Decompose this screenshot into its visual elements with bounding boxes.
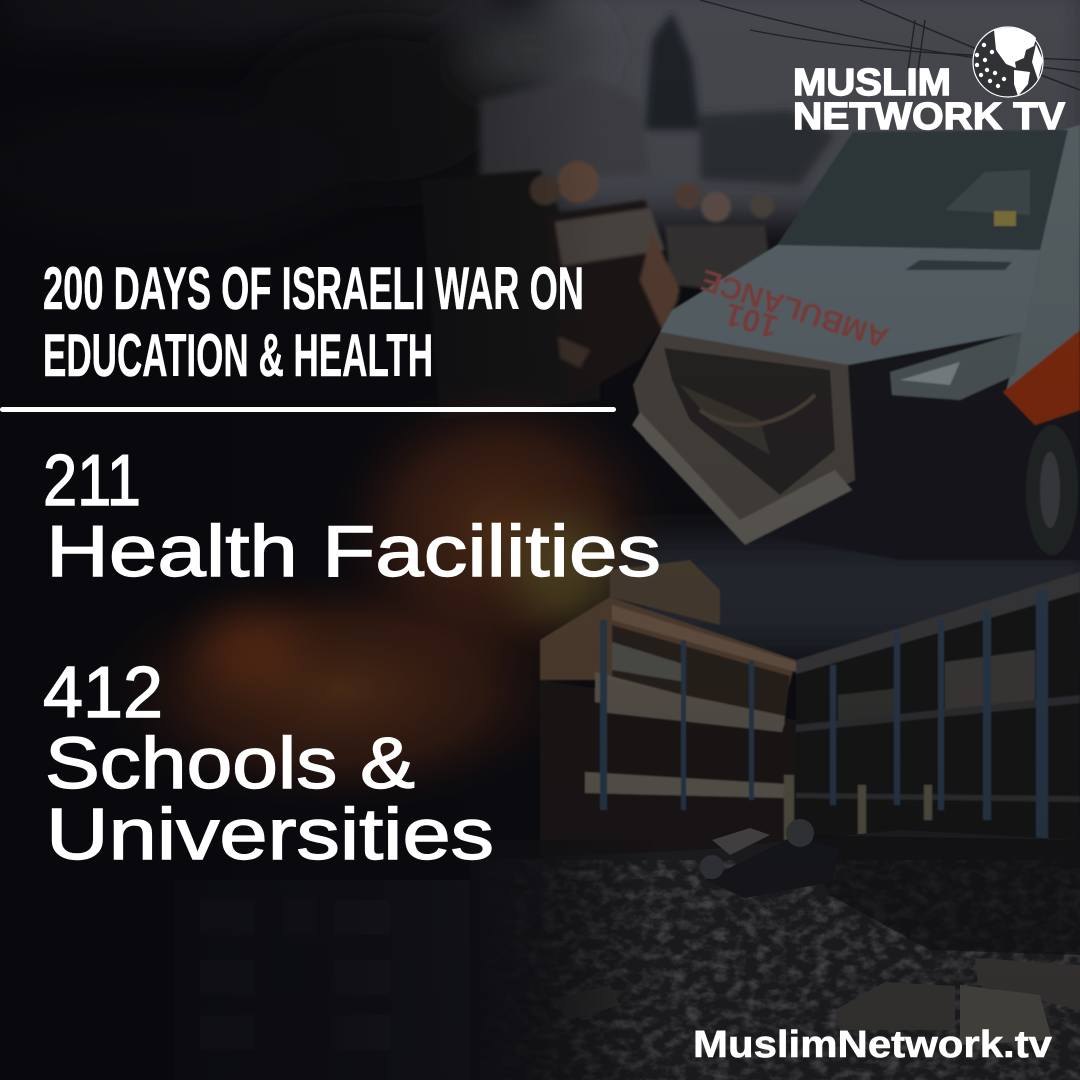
concrete blocks <box>975 958 1080 1010</box>
logo wordmark line 2: NETWORK TV <box>793 96 1066 138</box>
left wing upper bay <box>612 625 790 720</box>
hood lettering: AMBULANCE <box>697 262 893 354</box>
crowd of people <box>420 161 774 420</box>
front bumper and grille <box>633 332 855 535</box>
left wing dark bays <box>540 680 796 860</box>
number 412: 412 <box>43 653 163 733</box>
overturned car <box>705 838 840 898</box>
balcony railing <box>612 642 686 682</box>
bombed school building <box>540 560 1080 860</box>
sky behind the ambulance <box>0 0 1080 650</box>
tower silhouette and low buildings <box>480 12 835 185</box>
power lines <box>700 0 1080 90</box>
ghost tower block <box>175 880 545 1080</box>
left wing slabs <box>595 672 785 728</box>
rubble field <box>480 819 1080 1080</box>
fire glow <box>100 380 670 810</box>
label schools: Schools & <box>45 724 415 804</box>
label health facilities: Health Facilities <box>46 512 661 592</box>
title line 2: EDUCATION & HEALTH <box>43 322 433 389</box>
title <box>43 255 584 389</box>
columns <box>600 590 1048 840</box>
stat: health facilities <box>43 441 661 592</box>
ambulance side panel <box>1005 125 1080 395</box>
logo wordmark line 1: MUSLIM <box>793 62 951 104</box>
logo: Muslim Network TV <box>793 27 1066 138</box>
stat: schools and universities <box>43 653 494 875</box>
upper roof left <box>610 560 720 625</box>
label universities: Universities <box>46 795 494 875</box>
right wing <box>796 575 1080 860</box>
title line 1: 200 DAYS OF ISRAELI WAR ON <box>43 255 584 322</box>
ambulance: 101 <box>721 296 782 345</box>
divider line <box>0 407 616 412</box>
wheel <box>1026 425 1078 555</box>
footer website: MuslimNetwork.tv <box>693 1024 1052 1066</box>
headlight <box>890 332 1022 400</box>
smoke cloud <box>0 10 600 240</box>
ambulance <box>632 125 1080 560</box>
orange stripe <box>1003 330 1080 425</box>
ambulance underside <box>700 310 1080 560</box>
hood <box>660 245 1040 365</box>
icon: globe <box>973 27 1043 97</box>
number 211: 211 <box>43 441 141 521</box>
windshield <box>777 130 1068 250</box>
rubble left fade <box>470 840 660 1080</box>
